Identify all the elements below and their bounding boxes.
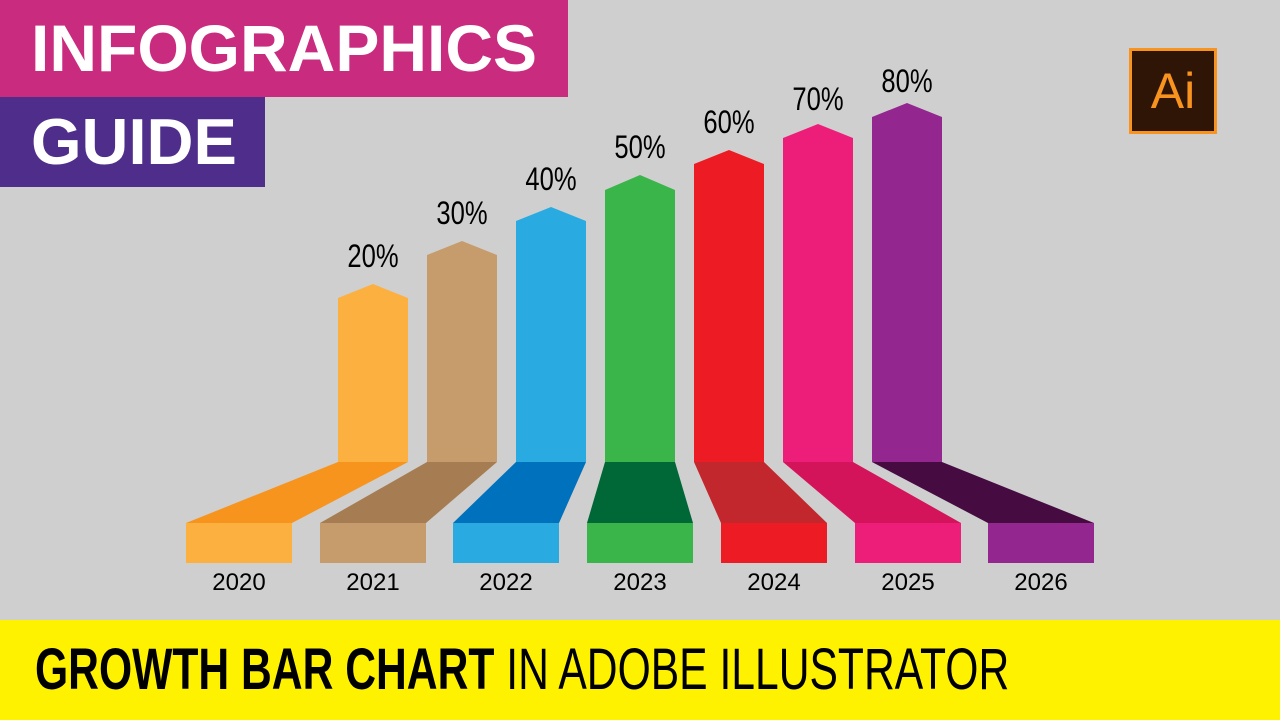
bar 2022: 40% xyxy=(525,162,577,198)
bar 2020: 2020 xyxy=(212,569,266,596)
footer text: GROWTH BAR CHART IN ADOBE ILLUSTRATOR xyxy=(35,637,1009,702)
bar 2025 xyxy=(783,82,961,596)
bar 2023: 50% xyxy=(614,130,666,166)
bar 2022: 2022 xyxy=(479,569,533,596)
bar 2024: 2024 xyxy=(747,569,801,596)
title: infographics: INFOGRAPHICS xyxy=(31,11,537,85)
bar 2025: 70% xyxy=(792,82,844,118)
bar 2022 xyxy=(453,162,586,596)
icon: Adobe Illustrator logo xyxy=(1129,48,1217,134)
bar 2025: 2025 xyxy=(881,569,935,596)
bar 2020 xyxy=(186,239,408,596)
bar 2026: 80% xyxy=(881,64,933,100)
title: guide: GUIDE xyxy=(31,105,237,178)
bar 2024 xyxy=(694,105,827,596)
bar 2024: 60% xyxy=(703,105,755,141)
bar 2023: 2023 xyxy=(613,569,667,596)
bar 2020: 20% xyxy=(347,239,399,275)
footer banner xyxy=(0,620,1280,720)
bar 2021 xyxy=(320,196,497,596)
bar 2026 xyxy=(872,64,1094,596)
bar 2026: 2026 xyxy=(1014,569,1068,596)
title: guide xyxy=(0,97,265,187)
title: infographics xyxy=(0,0,568,97)
icon: Adobe Illustrator logo: Ai xyxy=(1151,63,1195,119)
bar 2023 xyxy=(587,130,693,596)
bar 2021: 2021 xyxy=(346,569,400,596)
bar 2021: 30% xyxy=(436,196,488,232)
